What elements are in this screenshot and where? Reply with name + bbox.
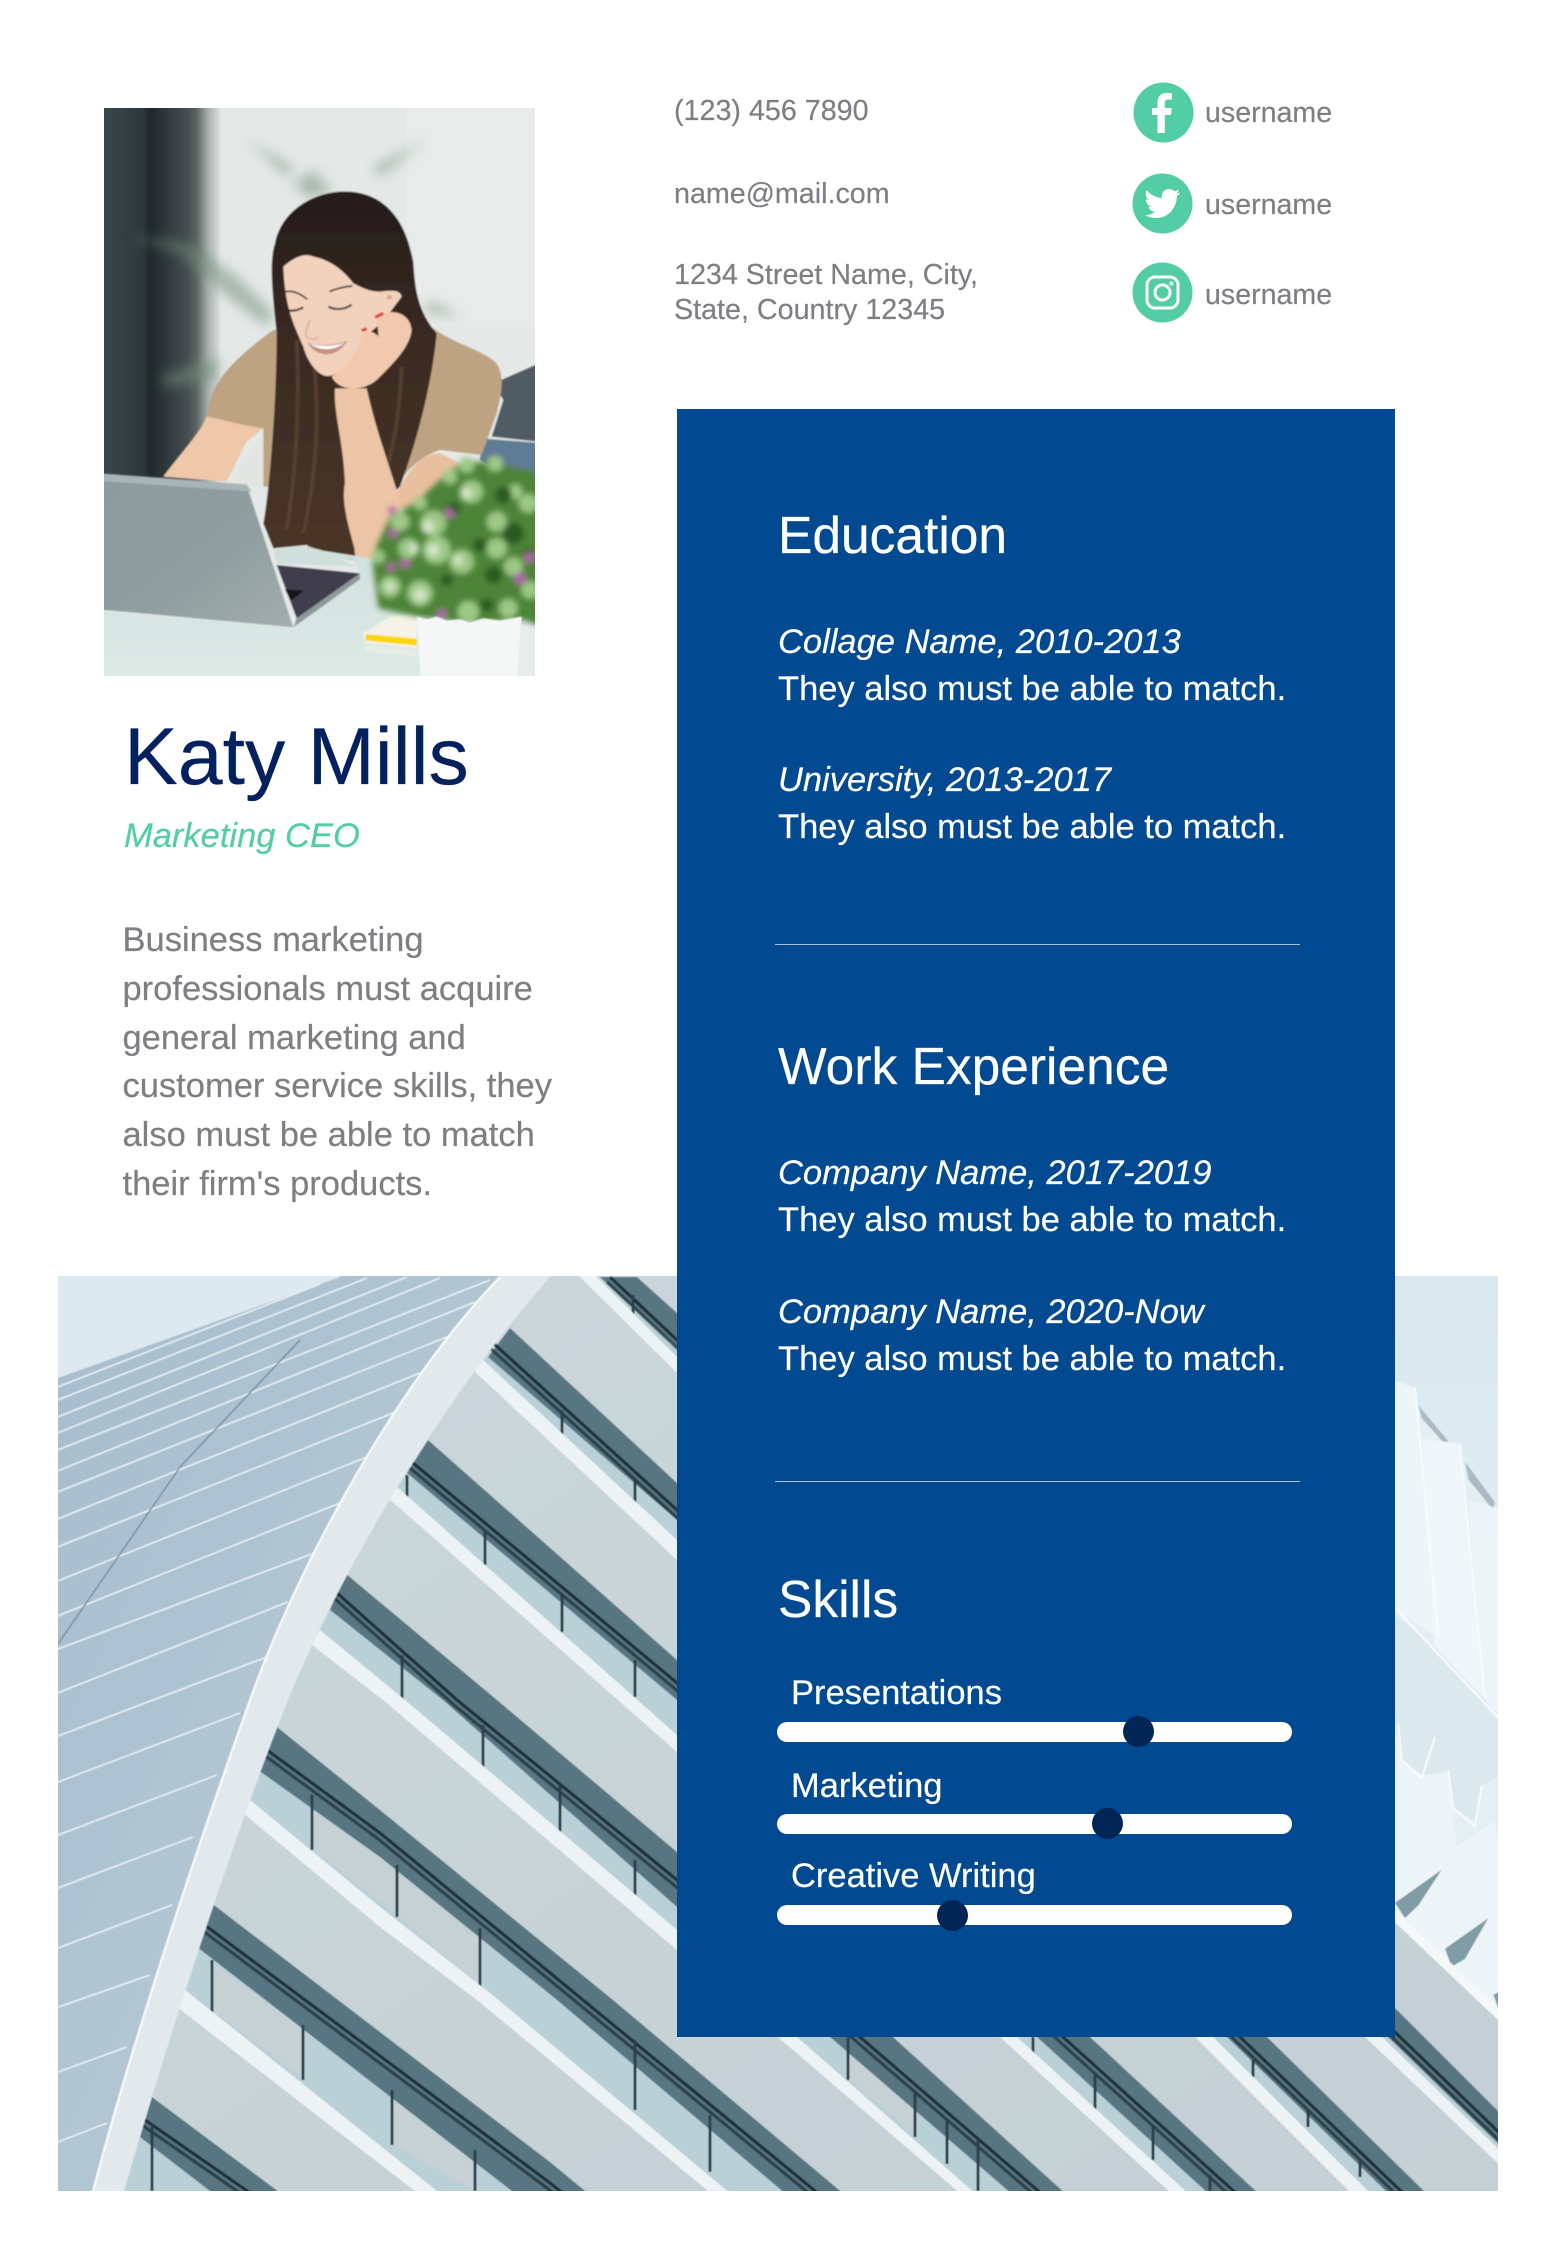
about paragraph: professionals must acquire [122, 970, 533, 1008]
heading: skills: Skills [778, 1570, 898, 1628]
about paragraph: general marketing and [122, 1019, 466, 1057]
work entry 1: They also must be able to match. [778, 1201, 1286, 1239]
glass [120, 1277, 1510, 2195]
about paragraph: also must be able to match [122, 1116, 535, 1154]
sky left [40, 1260, 520, 1385]
skill slider: marketing [777, 1814, 1292, 1834]
skill label: presentations: Presentations [791, 1674, 1002, 1712]
panel: education, experience and skills [677, 408, 1395, 2036]
education entry 2: University, 2013-2017 [778, 761, 1111, 799]
mullions [152, 1295, 1360, 2191]
work entry 2: Company Name, 2020-Now [778, 1292, 1204, 1330]
education entry 1: They also must be able to match. [778, 670, 1286, 708]
ledges [177, 1270, 1510, 2195]
social: facebook username: username [1205, 97, 1332, 129]
work entry 2: They also must be able to match. [778, 1340, 1286, 1378]
dark strips [140, 1277, 1510, 2195]
job title: Marketing CEO [124, 816, 360, 854]
skill slider: creative writing [777, 1905, 1292, 1925]
education entry 2: They also must be able to match. [778, 808, 1286, 846]
icon: facebook [1134, 82, 1194, 142]
about paragraph: Business marketing [122, 921, 424, 959]
education entry 1 [778, 622, 1286, 708]
about paragraph: their firm's products. [122, 1165, 432, 1203]
about paragraph: customer service skills, they [122, 1067, 552, 1105]
arch [92, 1260, 570, 2195]
heading: work experience: Work Experience [778, 1037, 1169, 1095]
skill slider: presentations [777, 1722, 1292, 1742]
icon: instagram [1132, 262, 1192, 322]
photo: woman with laptop [104, 108, 535, 676]
skill label: marketing: Marketing [791, 1767, 942, 1805]
contact: address [674, 258, 978, 326]
contact: address: State, Country 12345 [674, 294, 945, 326]
social: instagram username: username [1205, 279, 1332, 311]
contact: phone: (123) 456 7890 [674, 95, 869, 127]
work entry 1: Company Name, 2017-2019 [778, 1154, 1211, 1192]
skill label: creative writing: Creative Writing [791, 1857, 1036, 1895]
contact: address: 1234 Street Name, City, [674, 258, 978, 290]
icon: twitter [1132, 174, 1192, 234]
about paragraph [122, 921, 552, 1203]
heading: education: Education [778, 506, 1007, 564]
work entry 2 [778, 1292, 1286, 1378]
education entry 2 [778, 761, 1286, 846]
contact: email: name@mail.com [674, 178, 890, 210]
photo: building background [58, 1276, 1498, 2191]
work entry 1 [778, 1154, 1286, 1239]
name heading: Katy Mills [124, 712, 469, 802]
education entry 1: Collage Name, 2010-2013 [778, 622, 1181, 660]
right side: sky and white fins [1392, 1260, 1512, 2033]
social: twitter username: username [1205, 188, 1332, 220]
